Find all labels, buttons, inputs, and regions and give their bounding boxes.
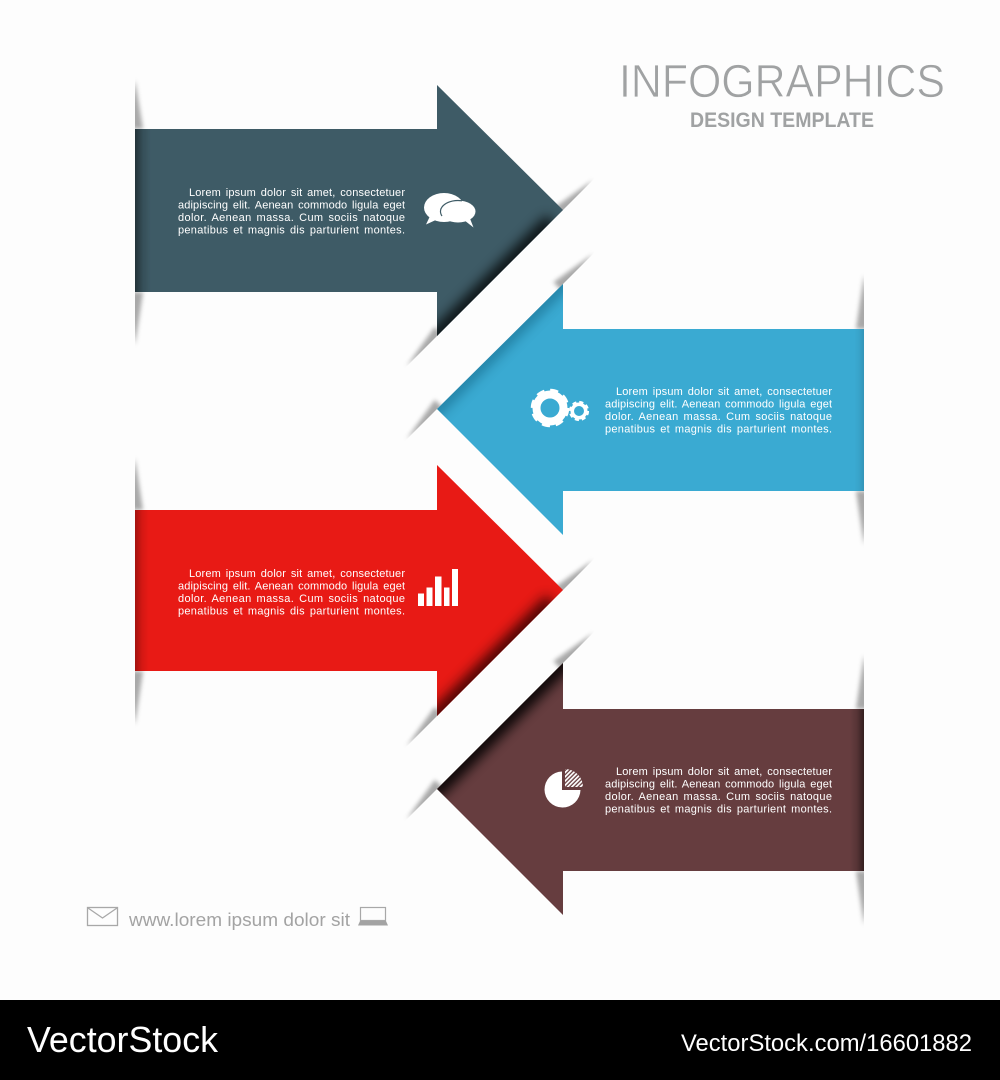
text block 2: dolor. Aenean massa. Cum sociis natoque xyxy=(605,411,832,423)
arrow 4: brown, pointing left xyxy=(432,651,864,915)
text block 2: adipiscing elit. Aenean commodo ligula eget xyxy=(605,398,832,410)
text block 4: adipiscing elit. Aenean commodo ligula eget xyxy=(605,778,832,790)
arrow 2: blue, pointing left xyxy=(430,277,864,535)
subtitle: DESIGN TEMPLATE xyxy=(690,109,874,132)
icon: gears xyxy=(532,390,588,426)
text block 3 xyxy=(178,568,405,618)
icon: laptop xyxy=(358,908,388,926)
website text: www.lorem ipsum dolor sit xyxy=(128,910,350,930)
icon: envelope xyxy=(88,908,118,926)
text block 3: adipiscing elit. Aenean commodo ligula eget xyxy=(178,580,405,592)
text block 1: dolor. Aenean massa. Cum sociis natoque xyxy=(178,212,405,224)
icon: pie chart xyxy=(545,769,583,807)
text block 2 xyxy=(605,386,832,436)
text block 3: penatibus et magnis dis parturient montes. xyxy=(178,606,405,618)
title xyxy=(619,55,945,132)
text block 4 xyxy=(605,766,832,816)
text block 2: penatibus et magnis dis parturient montes. xyxy=(605,424,832,436)
text block 4: dolor. Aenean massa. Cum sociis natoque xyxy=(605,791,832,803)
arrow 3: red, pointing right xyxy=(135,465,563,728)
text block 4: Lorem ipsum dolor sit amet, consectetuer xyxy=(616,766,832,778)
text block 1 xyxy=(178,187,405,236)
watermark url: VectorStock.com/16601882 xyxy=(681,1030,972,1057)
icon: bar chart xyxy=(418,569,458,606)
watermark logo: VectorStock xyxy=(27,1019,219,1060)
text block 2: Lorem ipsum dolor sit amet, consectetuer xyxy=(616,386,832,398)
watermark bar xyxy=(0,1000,1000,1080)
arrow 1: dark slate, pointing right xyxy=(135,85,563,348)
text block 4: penatibus et magnis dis parturient montes. xyxy=(605,804,832,816)
text block 1: Lorem ipsum dolor sit amet, consectetuer xyxy=(189,187,405,199)
icon: speech bubbles xyxy=(424,193,476,228)
title: INFOGRAPHICS xyxy=(619,55,945,107)
text block 1: adipiscing elit. Aenean commodo ligula eget xyxy=(178,200,405,212)
paper slit shadows outside arrows xyxy=(127,80,872,925)
text block 1: penatibus et magnis dis parturient montes. xyxy=(178,224,405,236)
text block 3: Lorem ipsum dolor sit amet, consectetuer xyxy=(189,568,405,580)
text block 3: dolor. Aenean massa. Cum sociis natoque xyxy=(178,593,405,605)
